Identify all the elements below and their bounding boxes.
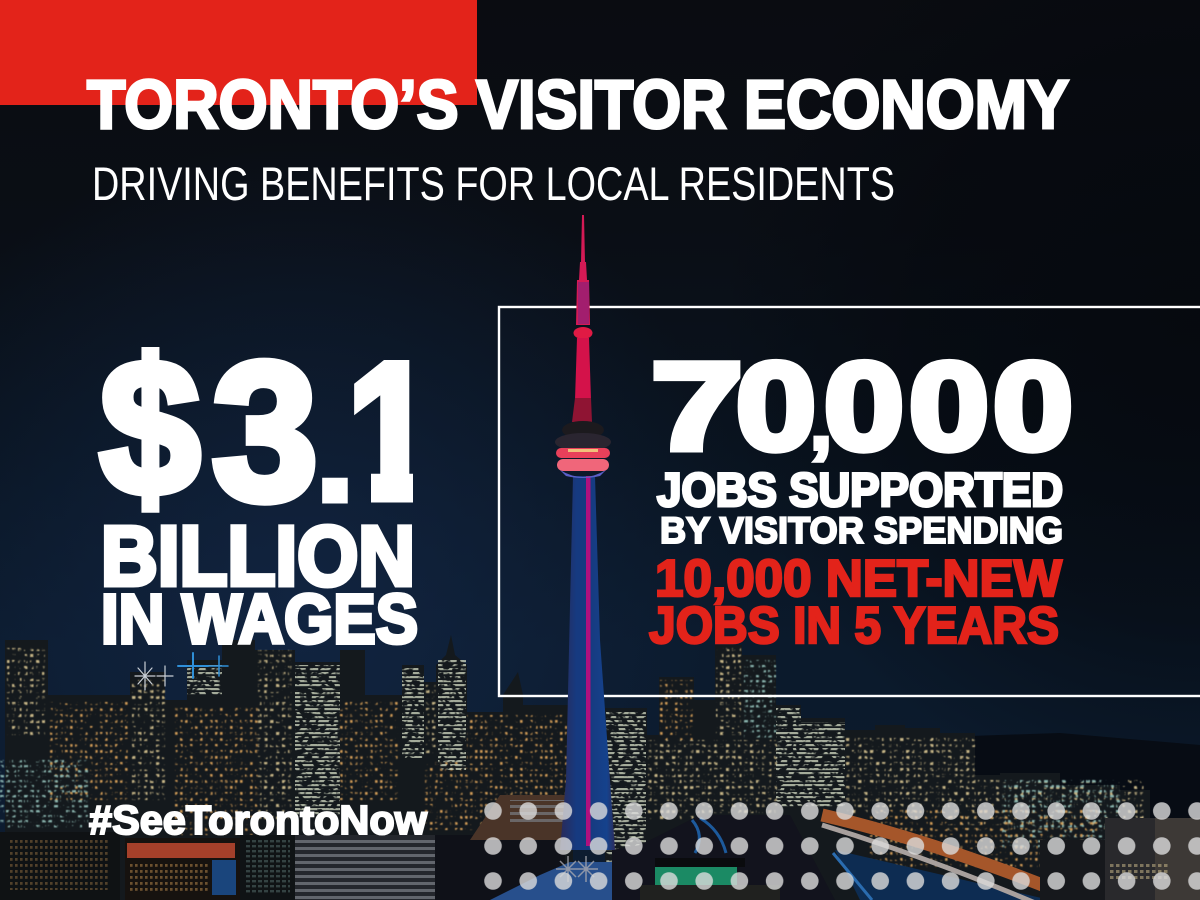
hashtag: #SeeTorontoNow <box>89 797 427 843</box>
big number: 3 <box>212 322 318 541</box>
CN Tower <box>555 215 615 882</box>
upper pod <box>574 327 592 339</box>
antenna spire <box>576 215 590 325</box>
big number: 0 <box>824 338 904 476</box>
building silhouettes <box>5 635 1150 900</box>
in wages: IN WAGES <box>101 580 418 658</box>
big number <box>97 347 413 513</box>
billion: BILLION <box>101 509 415 603</box>
red corner block <box>0 0 477 105</box>
stat: wages <box>97 347 418 646</box>
main pod <box>555 421 611 478</box>
foreground waterfront <box>435 795 1200 900</box>
big number: 0 <box>909 338 989 476</box>
lit windows <box>0 645 1145 870</box>
shoreline and expressway <box>822 815 1060 900</box>
foreground buildings left <box>0 832 435 900</box>
big number: 1 <box>347 323 435 540</box>
distant hill <box>970 733 1200 830</box>
title: TORONTO’S VISITOR ECONOMY <box>87 66 1069 143</box>
tower shaft <box>560 476 615 850</box>
city skyline photo <box>0 635 1200 900</box>
big number: 0 <box>736 338 816 476</box>
big number: $ <box>100 320 200 535</box>
subtitle: DRIVING BENEFITS FOR LOCAL RESIDENTS <box>92 157 895 210</box>
jobs in 5 years: JOBS IN 5 YEARS <box>649 597 1059 655</box>
big number: 7 <box>651 338 743 476</box>
mast <box>575 338 591 400</box>
star flares <box>135 653 228 690</box>
base flares <box>556 856 598 882</box>
by visitor spending: BY VISITOR SPENDING <box>660 510 1063 551</box>
bright towers <box>187 660 845 862</box>
jobs supported: JOBS SUPPORTED <box>657 463 1063 516</box>
big number: 0 <box>993 338 1073 476</box>
big number: . <box>319 398 351 523</box>
big number <box>651 338 1073 476</box>
legs <box>572 398 592 422</box>
stat: jobs <box>649 338 1073 655</box>
big number: , <box>810 381 832 466</box>
white outlined panel <box>499 307 1200 696</box>
net new jobs: 10,000 NET-NEW <box>655 550 1063 608</box>
dot pattern <box>484 802 1200 890</box>
